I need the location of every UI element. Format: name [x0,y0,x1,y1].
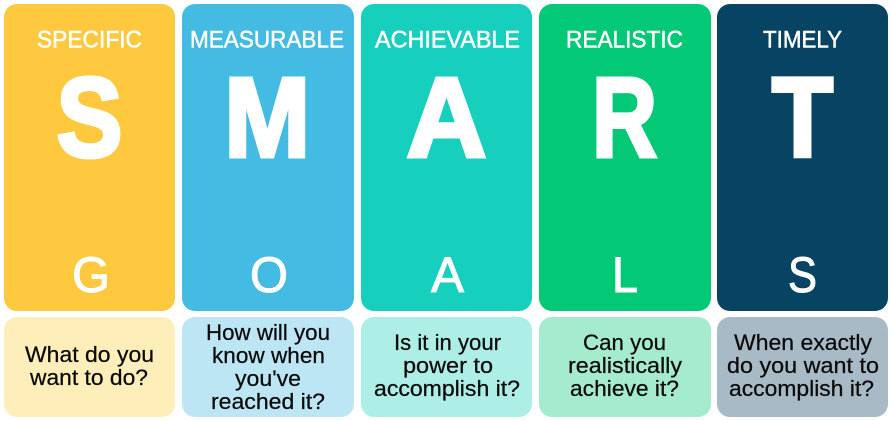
question panel: realistic [539,317,711,417]
heading: timely: TIMELY [763,26,842,54]
heading: realistic: REALISTIC [566,26,683,54]
question text: timely: accomplish it? [729,376,874,401]
letter G: G [72,247,110,303]
panel: achievable [361,4,532,311]
big letter A: A [406,54,486,180]
letter A: A [431,247,465,303]
big letter M: M [224,54,310,180]
question text: timely: When exactly [734,330,872,355]
question text: measurable: reached it? [211,389,325,414]
question text: measurable: How will you [206,320,330,345]
question text: realistic: realistically [568,353,682,378]
question text: specific: What do you [25,342,154,367]
question text: realistic: achieve it? [570,376,679,401]
question text: achievable: power to [403,353,493,378]
question text: achievable: Is it in your [394,330,501,355]
panel: realistic [539,4,711,311]
heading: specific: SPECIFIC [37,26,142,54]
question text: measurable: know when [212,343,325,368]
question panel: specific [4,317,175,417]
letter S: S [788,247,817,303]
letter O: O [250,247,288,303]
question text: achievable: accomplish it? [374,376,520,401]
heading: achievable: ACHIEVABLE [375,26,520,54]
panel: measurable [182,4,354,311]
heading: measurable: MEASURABLE [190,26,344,54]
big letter R: R [592,54,657,180]
big letter T: T [772,54,833,180]
question text: specific: want to do? [29,365,148,390]
panel: specific [4,4,175,311]
question text: measurable: you've [235,366,301,391]
question panel: measurable [182,317,354,417]
question text: timely: do you want to [727,353,879,378]
big letter S: S [56,54,122,180]
question panel: timely [717,317,888,417]
question panel: achievable [361,317,532,417]
panel: timely [717,4,888,311]
question text: realistic: Can you [583,330,666,355]
letter L: L [612,247,638,303]
